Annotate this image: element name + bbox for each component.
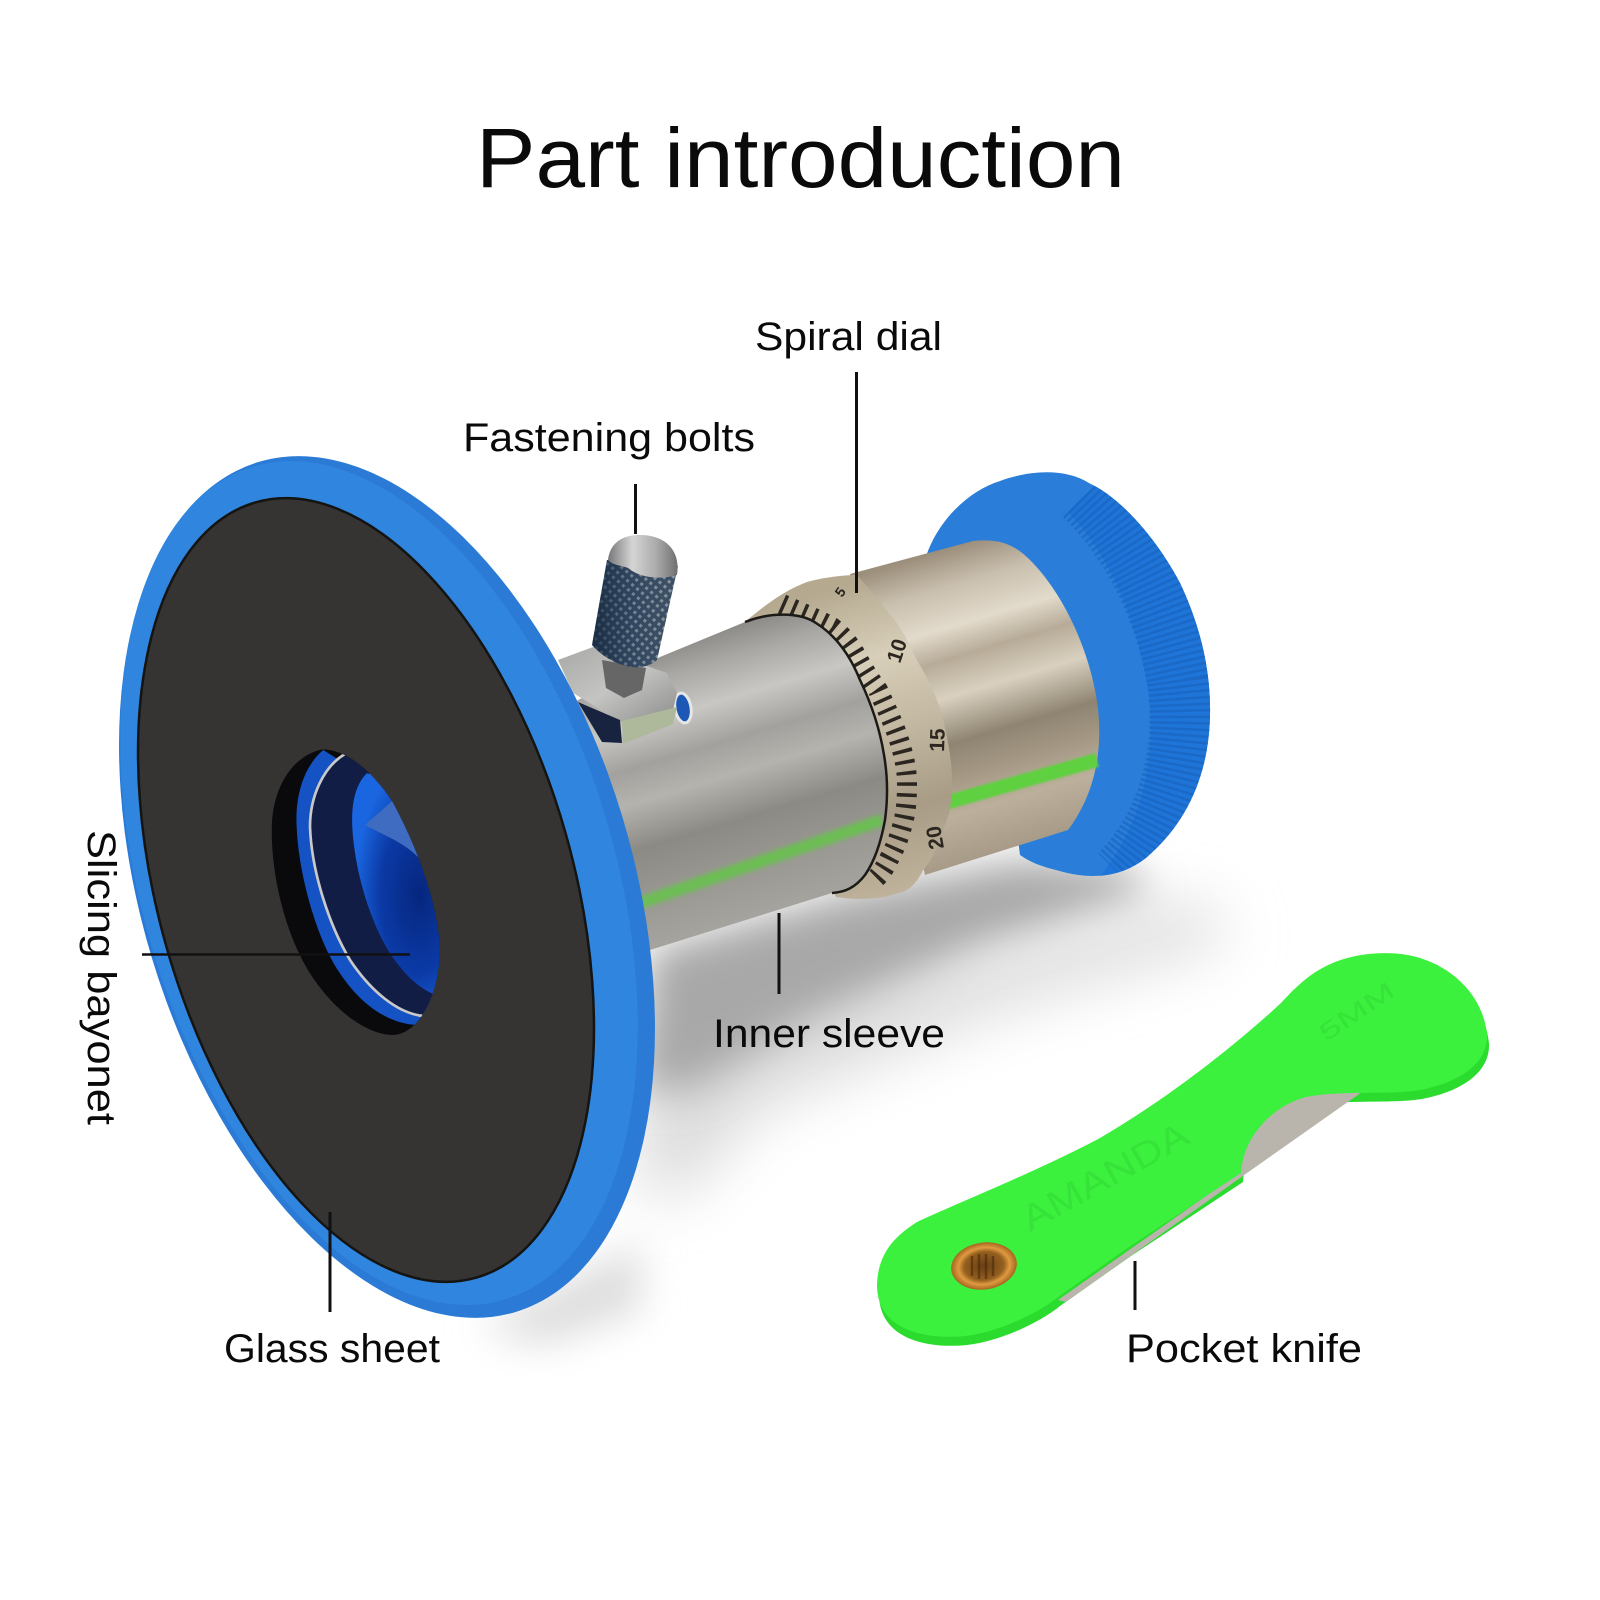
inner sleeve <box>540 615 887 950</box>
blade <box>1058 1092 1362 1302</box>
blue front lip <box>27 398 731 1368</box>
scale numbers: 5 <box>831 584 849 600</box>
scale numbers <box>831 584 950 851</box>
label: slicing bayonet: Slicing bayonet <box>79 830 123 1125</box>
embossed size mark: 5MM <box>1314 977 1400 1047</box>
knurled knob <box>592 560 678 667</box>
thread <box>602 660 646 698</box>
green reflection on sleeve <box>640 820 882 903</box>
scale numbers: 10 <box>883 636 912 666</box>
nut green side <box>622 707 677 744</box>
upper handle <box>877 953 1487 1337</box>
fastening bolt <box>558 535 693 744</box>
title: Part introduction <box>476 111 1125 205</box>
lower handle layer <box>879 962 1489 1346</box>
leader line: spiral dial <box>855 372 858 593</box>
glass sheet <box>56 446 676 1334</box>
hex nut <box>558 647 677 722</box>
scale numbers: 20 <box>922 824 949 851</box>
shadow under the device <box>480 860 1230 1345</box>
leader line: slicing bayonet <box>142 953 410 956</box>
label: pocket knife: Pocket knife <box>1126 1327 1362 1371</box>
leader line: inner sleeve <box>778 913 780 994</box>
outer barrel <box>850 540 1099 875</box>
spiral dial ring <box>745 575 952 899</box>
label: fastening bolts: Fastening bolts <box>463 416 755 460</box>
leader line: pocket knife <box>1134 1261 1136 1310</box>
pocket knife <box>877 953 1489 1346</box>
leader line: fastening bolts <box>634 484 637 534</box>
blue end cap <box>927 472 1210 876</box>
central opening <box>272 750 440 1035</box>
label: glass sheet: Glass sheet <box>224 1327 440 1371</box>
nut navy side <box>578 702 622 743</box>
green reflection on barrel <box>945 760 1097 803</box>
scale ticks <box>782 604 907 880</box>
embossed brand: AMANDA <box>1014 1113 1196 1239</box>
sleeve end edge <box>745 615 887 893</box>
bolt head <box>608 535 678 578</box>
scale numbers: 15 <box>926 728 950 752</box>
label: inner sleeve: Inner sleeve <box>713 1012 945 1056</box>
blue rim <box>23 391 751 1383</box>
leader line: glass sheet <box>328 1212 332 1312</box>
slicing disc <box>119 456 655 1318</box>
copper rivet <box>948 1238 1020 1294</box>
label: spiral dial: Spiral dial <box>755 315 942 359</box>
knob shading <box>592 560 678 667</box>
slot in sleeve <box>673 692 693 724</box>
